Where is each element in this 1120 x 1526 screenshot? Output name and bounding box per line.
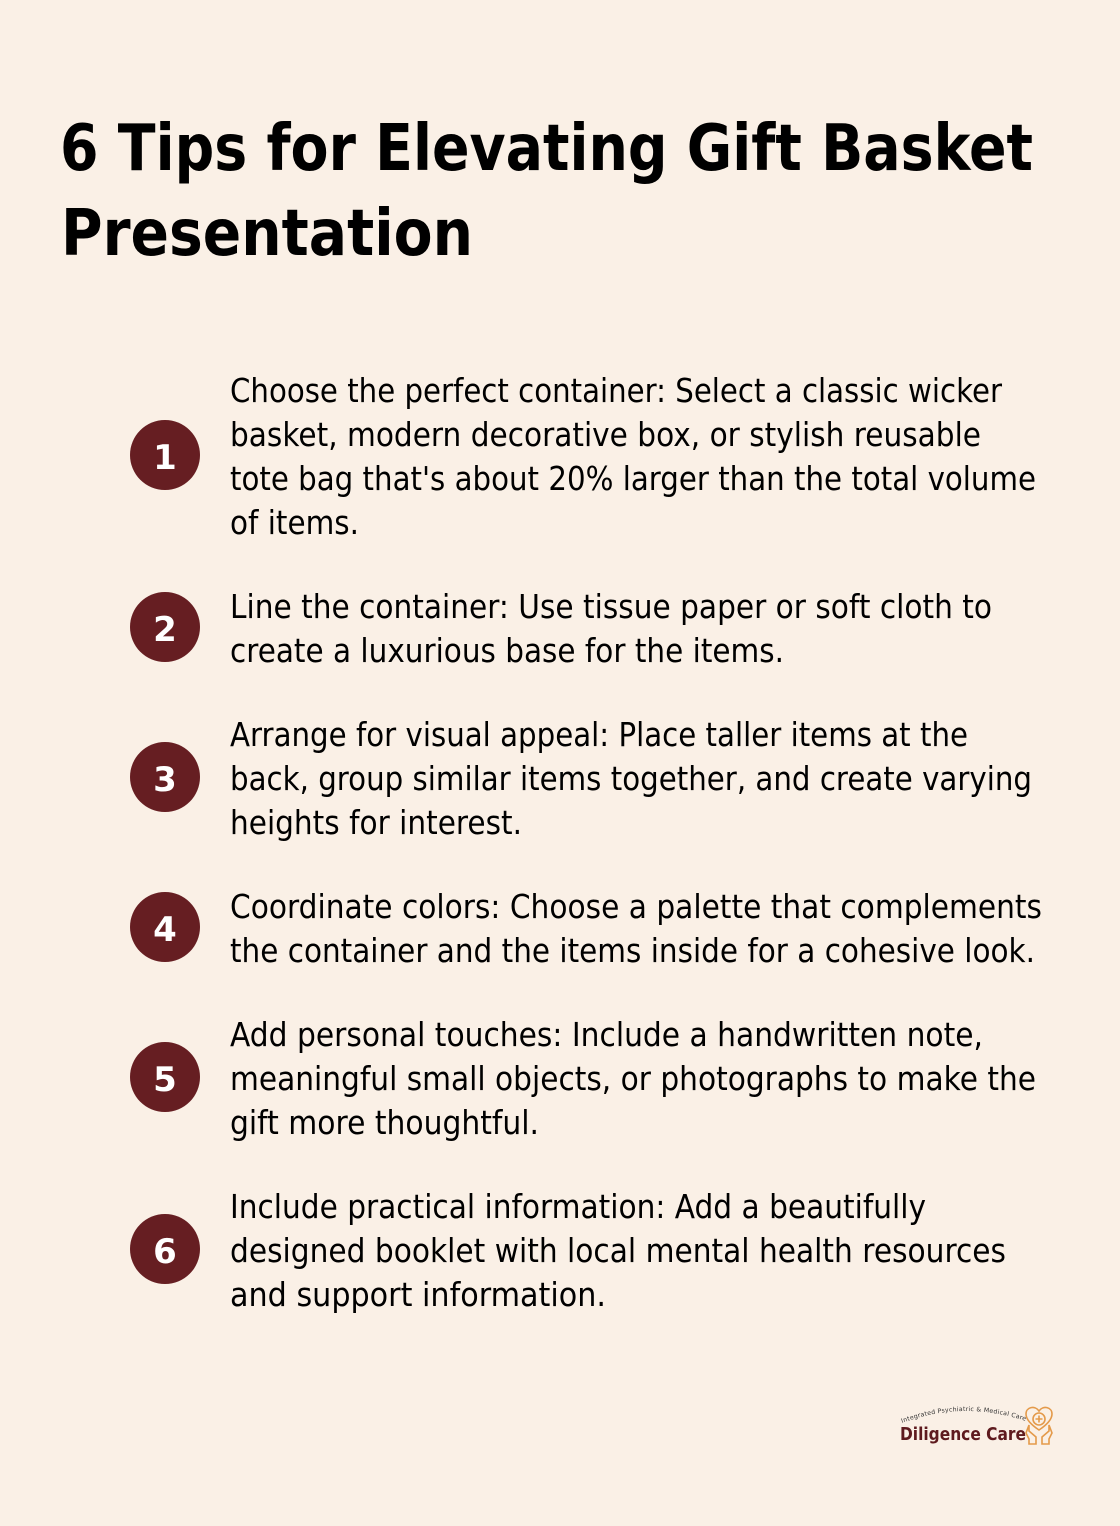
tip 6 text: designed booklet with local mental health resources bbox=[230, 1231, 1006, 1270]
tip 2 text bbox=[230, 587, 992, 670]
tip 3 text: heights for interest. bbox=[230, 803, 522, 842]
number badge 2: 2 bbox=[153, 610, 177, 650]
tip 6 bbox=[130, 1187, 1006, 1314]
number badge 6: 6 bbox=[153, 1232, 177, 1272]
tip 1 text: tote bag that's about 20% larger than the total volume bbox=[230, 459, 1036, 498]
number badge 5 bbox=[130, 1042, 200, 1112]
logo icon: heart and hands bbox=[1026, 1407, 1052, 1444]
tip 3 text: back, group similar items together, and create varying bbox=[230, 759, 1032, 798]
number badge 6 bbox=[130, 1214, 200, 1284]
tip 1 text: Choose the perfect container: Select a classic wicker bbox=[230, 371, 1002, 410]
tip 3 bbox=[130, 715, 1032, 842]
number badge 4: 4 bbox=[153, 910, 177, 950]
tip 2 bbox=[130, 587, 992, 670]
tip 2 text: Line the container: Use tissue paper or soft cloth to bbox=[230, 587, 992, 626]
logo tagline: Integrated Psychiatric & Medical Care bbox=[901, 1406, 1026, 1423]
tip 6 text: Include practical information: Add a beautifully bbox=[230, 1187, 926, 1226]
title bbox=[60, 112, 1033, 271]
tip 4 text: Coordinate colors: Choose a palette that complements bbox=[230, 887, 1042, 926]
tip 1 bbox=[130, 371, 1036, 542]
tip 5 text: Add personal touches: Include a handwritten note, bbox=[230, 1015, 983, 1054]
tip 2 text: create a luxurious base for the items. bbox=[230, 631, 784, 670]
tip 5 text: gift more thoughtful. bbox=[230, 1103, 539, 1142]
tip 1 text: of items. bbox=[230, 503, 359, 542]
tip 3 text bbox=[230, 715, 1032, 842]
number badge 1: 1 bbox=[153, 438, 177, 478]
number badge 1 bbox=[130, 420, 200, 490]
tip 1 text bbox=[230, 371, 1036, 542]
tip 4 bbox=[130, 887, 1042, 970]
tip 5 text bbox=[230, 1015, 1036, 1142]
tip 5 text: meaningful small objects, or photographs to make the bbox=[230, 1059, 1036, 1098]
logo wordmark: Diligence Care bbox=[900, 1424, 1026, 1445]
tip 6 text bbox=[230, 1187, 1006, 1314]
tip 4 text bbox=[230, 887, 1042, 970]
number badge 5: 5 bbox=[153, 1060, 177, 1100]
tip 1 text: basket, modern decorative box, or stylish reusable bbox=[230, 415, 981, 454]
number badge 3: 3 bbox=[153, 760, 177, 800]
logo: Diligence Care bbox=[900, 1406, 1053, 1445]
title: Presentation bbox=[61, 197, 473, 271]
tip 3 text: Arrange for visual appeal: Place taller items at the bbox=[230, 715, 968, 754]
number badge 4 bbox=[130, 892, 200, 962]
tip 6 text: and support information. bbox=[230, 1275, 606, 1314]
tip 4 text: the container and the items inside for a cohesive look. bbox=[230, 931, 1035, 970]
number badge 2 bbox=[130, 592, 200, 662]
tip 5 bbox=[130, 1015, 1036, 1142]
number badge 3 bbox=[130, 742, 200, 812]
